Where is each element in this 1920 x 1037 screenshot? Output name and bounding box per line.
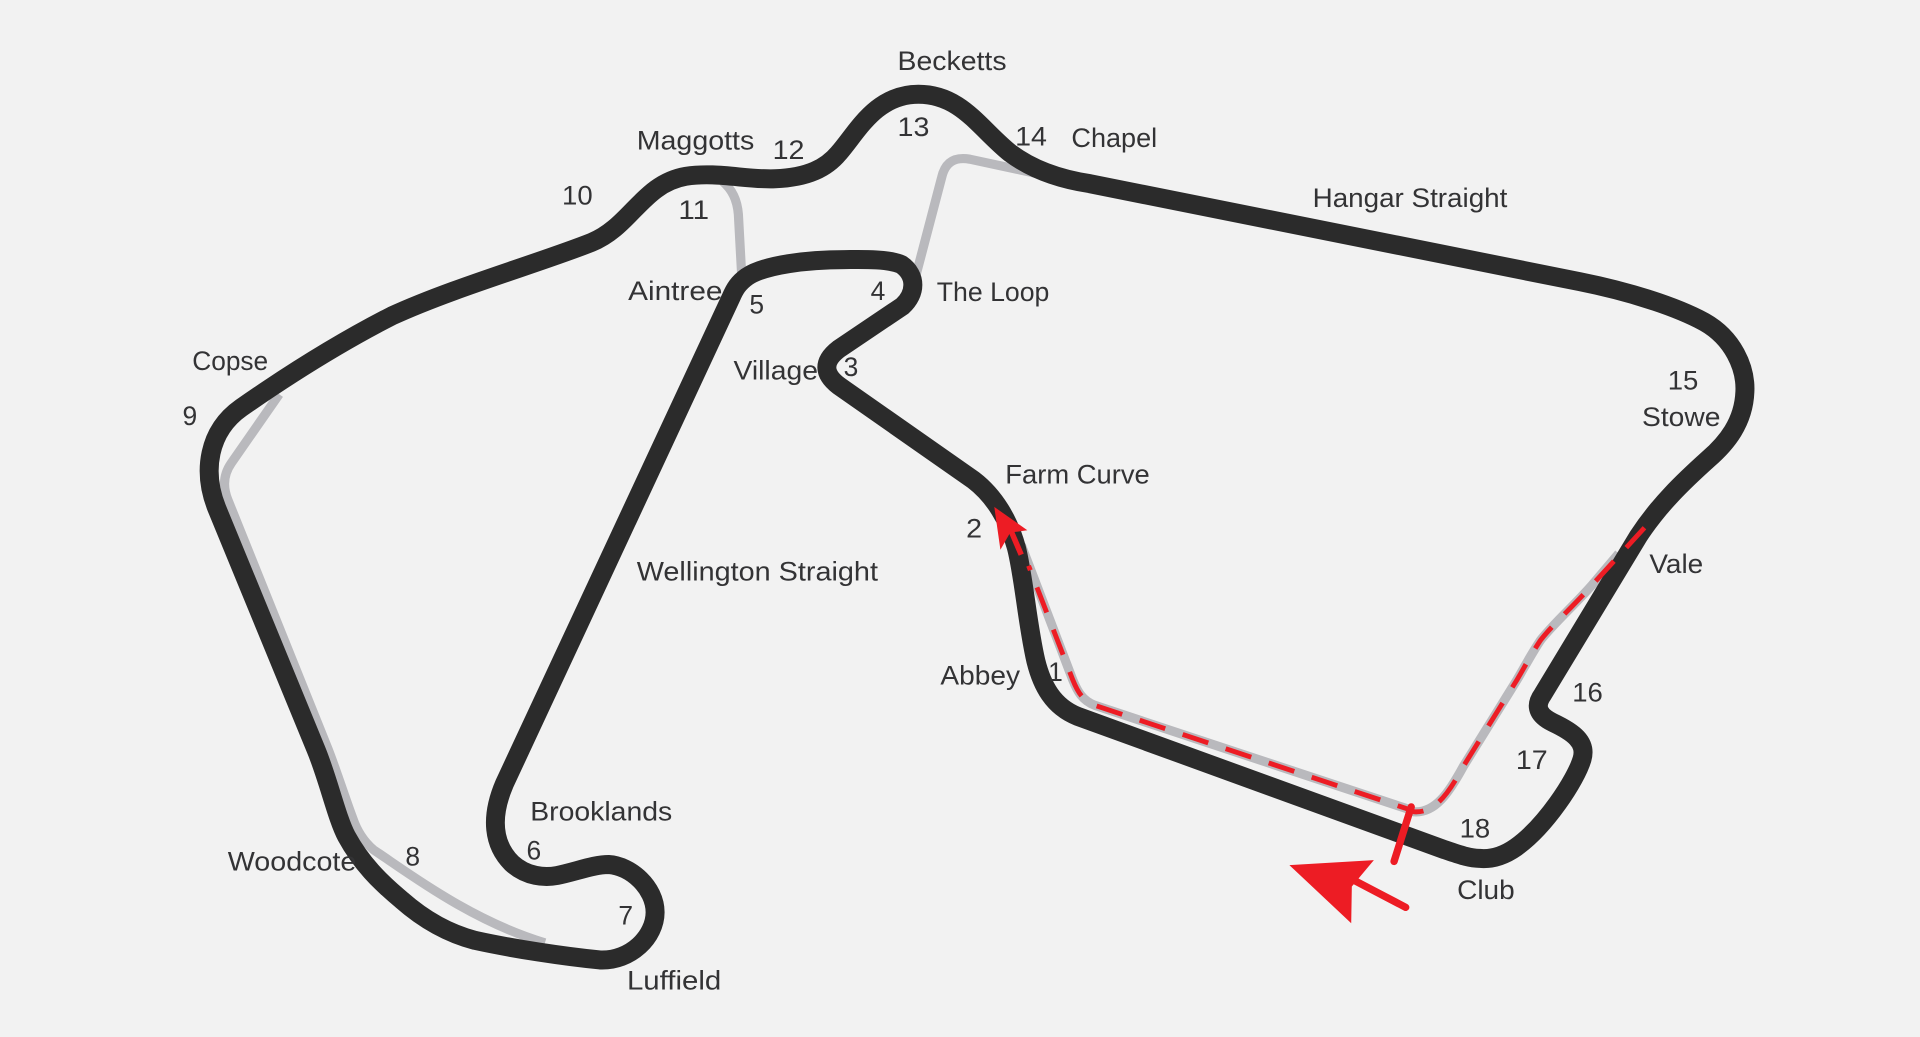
- number 2: 2: [966, 514, 982, 544]
- number 4: 4: [871, 276, 885, 306]
- red dashed lap route: [1029, 528, 1644, 812]
- number 6: 6: [527, 836, 541, 866]
- label: Luffield: Luffield: [627, 965, 721, 995]
- grey link: vale to abbey pit straight: [1021, 545, 1619, 812]
- number 3: 3: [844, 352, 858, 382]
- number 7: 7: [618, 900, 633, 930]
- label: Hangar Straight: Hangar Straight: [1313, 183, 1508, 213]
- label: The Loop: The Loop: [937, 277, 1049, 307]
- arrow: race direction: [1289, 860, 1406, 923]
- alternate layouts in grey: [224, 159, 1619, 943]
- number 18: 18: [1460, 814, 1490, 844]
- label: Abbey: Abbey: [940, 660, 1021, 690]
- corner names and numbers: [182, 46, 1720, 995]
- icon: small direction arrow at farm curve: [994, 507, 1027, 555]
- label: Village: Village: [733, 356, 818, 386]
- number 14: 14: [1015, 122, 1047, 152]
- main track outline: [209, 94, 1745, 960]
- label: Woodcote: Woodcote: [228, 847, 356, 877]
- grey link: maggotts to aintree: [722, 181, 742, 282]
- label: Wellington Straight: Wellington Straight: [637, 556, 879, 586]
- label: Becketts: Becketts: [898, 46, 1007, 76]
- number 16: 16: [1572, 678, 1603, 708]
- number 17: 17: [1516, 745, 1548, 775]
- number 11: 11: [678, 195, 709, 225]
- grey link: the loop to chapel: [916, 159, 1038, 276]
- grey link: copse to woodcote and luffield: [224, 394, 545, 943]
- label: Copse: Copse: [192, 346, 268, 376]
- number 1: 1: [1048, 657, 1063, 687]
- number 10: 10: [562, 180, 593, 210]
- label: Chapel: Chapel: [1071, 123, 1157, 153]
- label: Aintree: Aintree: [628, 276, 722, 306]
- label: Stowe: Stowe: [1642, 402, 1720, 432]
- label: Vale: Vale: [1649, 549, 1703, 579]
- number 13: 13: [898, 112, 929, 142]
- label: Farm Curve: Farm Curve: [1005, 460, 1150, 490]
- number 15: 15: [1668, 365, 1698, 395]
- number 9: 9: [182, 401, 197, 431]
- label: Club: Club: [1457, 875, 1515, 905]
- label: Brooklands: Brooklands: [530, 796, 672, 826]
- start finish line: [1394, 807, 1411, 861]
- number 12: 12: [773, 135, 804, 165]
- number 5: 5: [749, 289, 764, 319]
- label: Maggotts: Maggotts: [637, 125, 754, 155]
- number 8: 8: [405, 842, 420, 872]
